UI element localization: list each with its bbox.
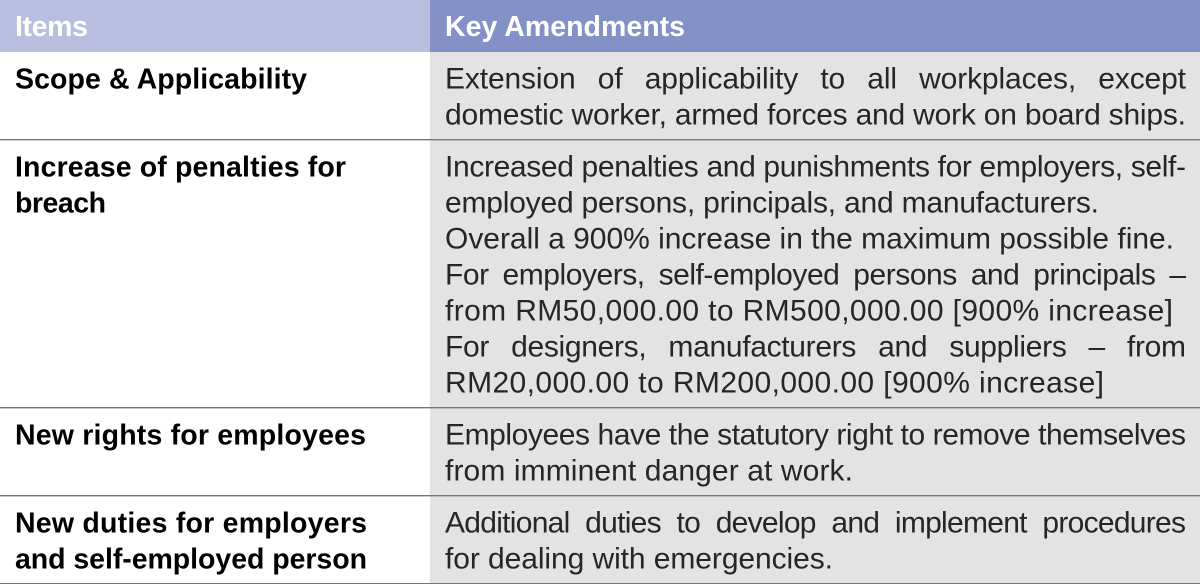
amendment text: Increased penalties and punishments for employers, self- xyxy=(445,150,1186,184)
header: items: Items xyxy=(15,11,88,43)
row: new rights for employees xyxy=(15,418,1186,488)
amendment text: Overall a 900% increase in the maximum possible fine. xyxy=(445,222,1174,256)
amendment text: Additional duties to develop and implement procedures xyxy=(445,506,1186,540)
amendment text: For employers, self-employed persons and principals – xyxy=(445,258,1186,292)
item label: New duties for employers xyxy=(15,508,367,540)
header: key amendments xyxy=(430,0,1200,52)
amendment text xyxy=(445,62,1187,132)
amendment text: for dealing with emergencies. xyxy=(445,542,833,576)
item label: and self-employed person xyxy=(15,544,367,576)
header: key amendments: Key Amendments xyxy=(445,11,685,43)
amendment text: employed persons, principals, and manufacturers. xyxy=(445,186,1099,220)
row: increase of penalties xyxy=(15,150,1186,400)
row: new duties for employers xyxy=(15,506,1186,576)
amendment text: from RM50,000.00 to RM500,000.00 [900% increase] xyxy=(445,294,1173,328)
header: items xyxy=(0,0,430,52)
amendment text: For designers, manufacturers and suppliers – from xyxy=(445,330,1186,364)
item label xyxy=(15,508,367,576)
amendment text: RM20,000.00 to RM200,000.00 [900% increase] xyxy=(445,366,1104,400)
item label: breach xyxy=(15,188,106,220)
item label: Scope & Applicability xyxy=(15,64,307,96)
row: scope and applicability xyxy=(15,62,1187,132)
amendment text xyxy=(445,506,1186,576)
amendment text: Employees have the statutory right to remove themselves xyxy=(445,418,1186,452)
amendment text: domestic worker, armed forces and work on board ships. xyxy=(445,98,1186,132)
grey amendments column background xyxy=(430,52,1200,584)
amendment text: from imminent danger at work. xyxy=(445,454,853,488)
item label xyxy=(15,152,346,220)
item label: New rights for employees xyxy=(15,420,366,452)
item label: Increase of penalties for xyxy=(15,152,346,184)
amendment text: Extension of applicability to all workplaces, except xyxy=(445,62,1187,96)
amendment text xyxy=(445,150,1186,400)
amendment text xyxy=(445,418,1186,488)
